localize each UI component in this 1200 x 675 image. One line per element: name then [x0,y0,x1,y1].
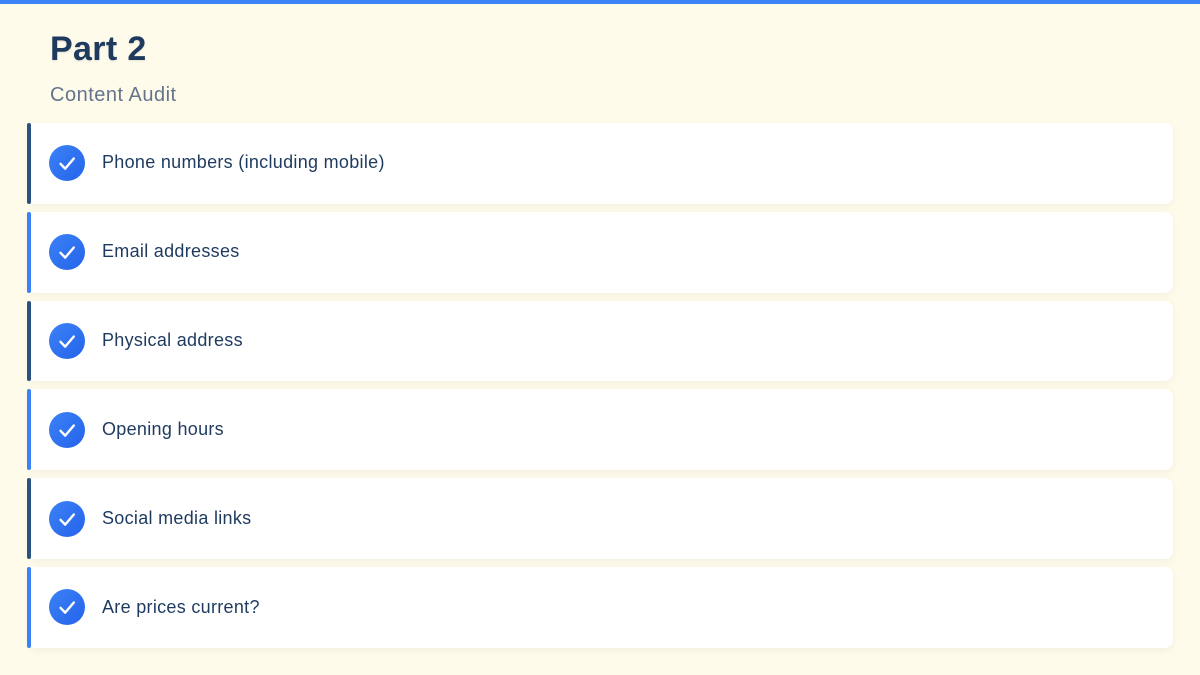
top accent bar [0,0,1200,4]
title: Part 2 [50,30,147,68]
panel: social media links item [27,478,1173,559]
panel: opening hours item [27,389,1173,470]
item text: Are prices current? [102,597,260,617]
item text: Opening hours [102,419,224,439]
icon: check [49,589,85,625]
item text: Phone numbers (including mobile) [102,152,385,172]
item text: Physical address [102,330,243,350]
icon: check [49,412,85,448]
icon: check [49,501,85,537]
icon: check [49,323,85,359]
panel: email addresses item [27,212,1173,293]
subtitle: Content Audit [50,84,177,106]
item text: Social media links [102,508,251,528]
item text: Email addresses [102,241,240,261]
icon: check [49,234,85,270]
panel: are prices current item [27,567,1173,648]
icon: check [49,145,85,181]
panel: physical address item [27,301,1173,381]
panel: phone numbers item [27,123,1173,204]
